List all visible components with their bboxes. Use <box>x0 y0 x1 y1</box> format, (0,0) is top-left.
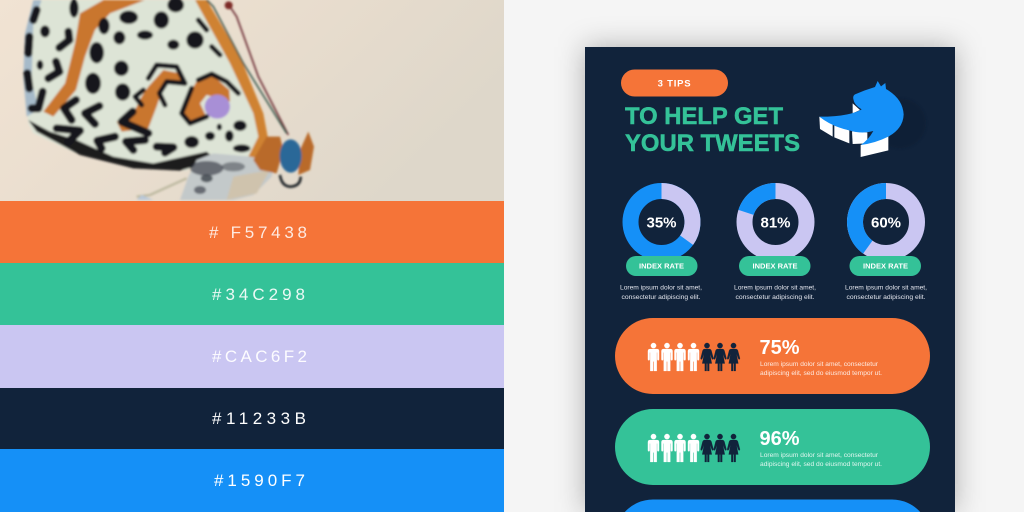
heading <box>625 103 800 157</box>
text block: column 1 caption: Lorem ipsum dolor sit amet, <box>620 284 702 292</box>
text block: stat description <box>760 361 882 377</box>
swatch: lavender: #CAC6F2 <box>212 347 307 366</box>
photo: butterfly on beige background <box>0 0 504 201</box>
label pill: index rate 3 <box>850 256 921 276</box>
panel: orange stat 75%: 75% <box>760 337 800 359</box>
panel: blue stat cropped <box>625 500 920 512</box>
icon: twitter bird with 3D extrusion <box>819 81 926 157</box>
panel: green stat 96% <box>615 409 930 485</box>
text block: stat description: Lorem ipsum dolor sit amet, consectetur <box>760 452 879 459</box>
donut chart: 60%: 60% <box>871 214 901 232</box>
badge: 3 tips <box>621 70 728 96</box>
badge: 3 tips: 3 TIPS <box>658 78 691 90</box>
icon: people row <box>648 434 740 462</box>
text block: column 3 caption: Lorem ipsum dolor sit amet, <box>845 284 927 292</box>
swatch: blue <box>0 449 504 512</box>
donut chart: 35% <box>630 191 693 253</box>
panel: poster <box>585 47 955 512</box>
label pill: index rate 2: INDEX RATE <box>752 264 798 270</box>
swatch: green: #34C298 <box>212 285 305 304</box>
swatch: orange <box>0 201 504 263</box>
text block: stat description: adipiscing elit, sed do eiusmod tempor ut. <box>760 461 882 468</box>
heading: YOUR TWEETS <box>625 130 800 157</box>
donut chart: 60% <box>855 191 917 253</box>
text block: column 2 caption: Lorem ipsum dolor sit amet, <box>734 284 816 292</box>
heading: TO HELP GET <box>625 103 783 130</box>
donut chart: 81%: 81% <box>760 214 791 232</box>
label pill: index rate 3: INDEX RATE <box>863 264 908 270</box>
text block: stat description <box>760 452 882 468</box>
donut chart: 81% <box>744 191 806 253</box>
text block: column 1 caption: consectetur adipiscing elit. <box>622 294 701 301</box>
swatch: lavender <box>0 325 504 388</box>
text block: column 3 caption: consectetur adipiscing elit. <box>846 294 926 301</box>
panel: green stat 96%: 96% <box>760 428 800 450</box>
swatch: orange: # F57438 <box>209 223 307 242</box>
text block: stat description: Lorem ipsum dolor sit amet, consectetur <box>760 361 879 368</box>
icon: people row <box>648 343 740 371</box>
panel: orange stat 75% <box>615 318 930 394</box>
swatch: blue: #1590F7 <box>214 471 305 490</box>
donut chart: 35%: 35% <box>646 214 677 232</box>
butterfly wing <box>23 0 314 200</box>
swatch: navy <box>0 388 504 449</box>
text block: stat description: adipiscing elit, sed do eiusmod tempor ut. <box>760 370 882 377</box>
label pill: index rate 2 <box>739 256 810 276</box>
text block: column 2 caption: consectetur adipiscing elit. <box>736 294 815 301</box>
text block: column 1 caption <box>620 284 702 301</box>
label pill: index rate 1 <box>626 256 698 276</box>
text block: column 3 caption <box>845 284 927 301</box>
swatch: navy: #11233B <box>212 409 306 428</box>
text block: column 2 caption <box>734 284 816 301</box>
swatch: green <box>0 263 504 325</box>
label pill: index rate 1: INDEX RATE <box>639 264 684 270</box>
